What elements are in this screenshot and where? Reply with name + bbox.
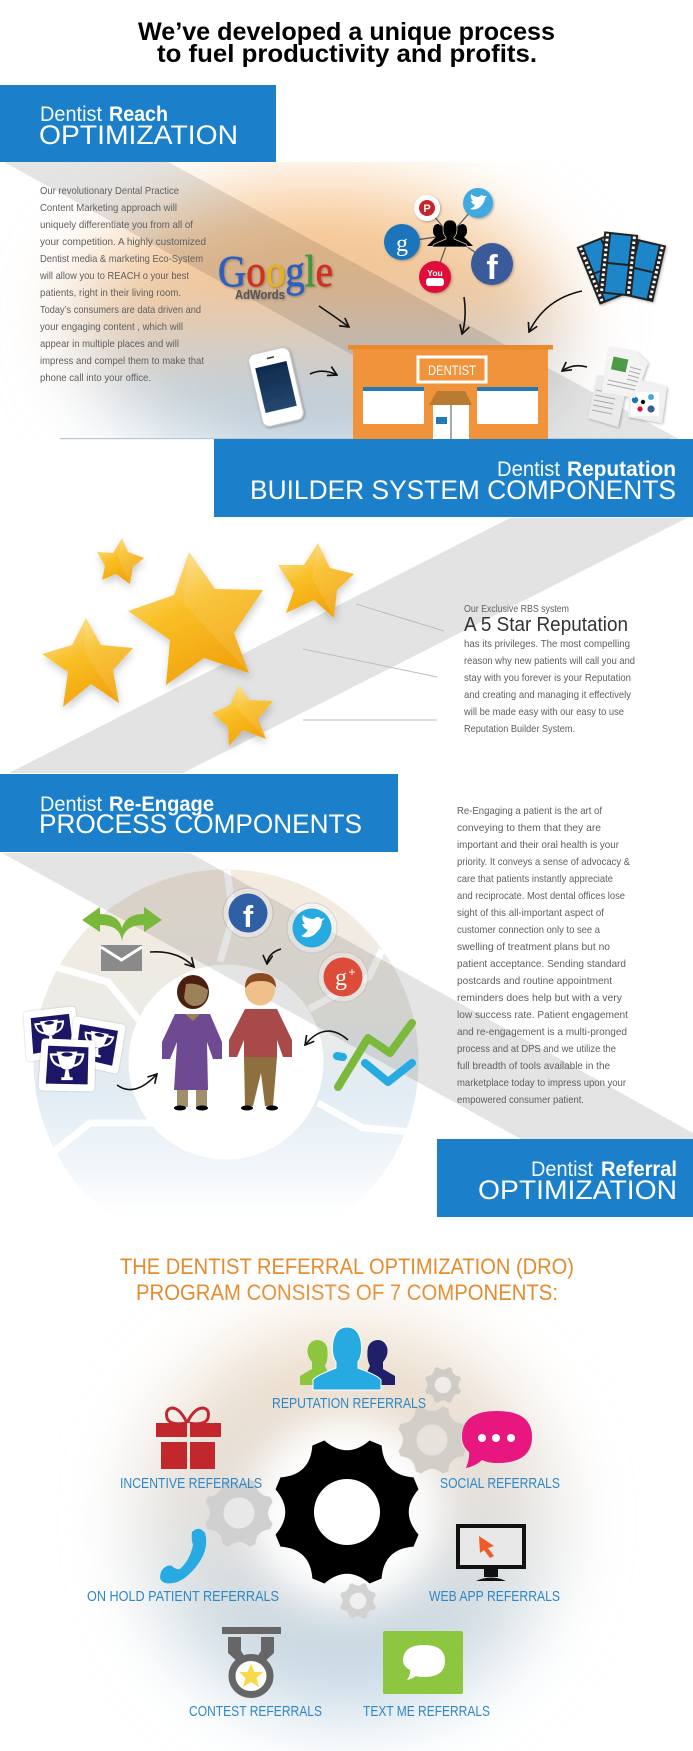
header: dentist re-engage process components: Re-Engage [109,793,214,816]
background glow: referral components [137,1328,557,1712]
component: social referrals: SOCIAL REFERRALS [440,1475,560,1492]
text block: re-engage description: important and their oral health is your [457,840,620,851]
text block: reach description: will allow you to REACH o your best [39,271,189,282]
text block: re-engage description: priority. It conveys a sense of advocacy & [457,857,630,868]
icon: medium gear left [205,1479,273,1547]
heading: dro program: PROGRAM CONSISTS OF 7 COMPONENTS: [136,1280,558,1305]
component: web app referrals: WEB APP REFERRALS [429,1588,560,1605]
icon: social network cluster: g [396,231,408,257]
text block: reach description: impress and compel them to make that [40,356,204,367]
icon: dentist building: DENTIST [428,363,476,378]
text block: 5 star reputation: will be made easy with our easy to use [463,707,624,718]
icon: facebook badge: f [243,899,254,934]
text block: 5 star reputation: A 5 Star Reputation [464,614,628,636]
header: dentist reach optimization [0,85,276,162]
text block: reach description: Our revolutionary Dental Practice [40,186,179,197]
text block: 5 star reputation: Our Exclusive RBS system [464,604,569,615]
component: text me referrals [363,1631,490,1720]
icon: star bottom [212,685,273,746]
text block: re-engage description: and re-engagement is a multi-pronged [457,1027,627,1038]
icon: google plus badge: + [348,965,356,979]
header: dentist referral optimization: Referral [601,1158,677,1181]
icon: documents [588,347,667,427]
header: dentist referral optimization: Dentist [531,1158,593,1181]
icon: green split arrows [82,907,162,941]
arrow: adwords to dentist [319,306,349,327]
figure: man [229,973,292,1110]
header: dentist reputation builder system components: Reputation [567,458,676,481]
text block: reach description: Dentist media & marketing Eco-System [40,254,203,265]
header: dentist reputation builder system components [214,439,693,517]
component: incentive referrals [120,1408,262,1492]
arrow: stamps to patients [117,1074,157,1090]
text block: reach description: your competition. A highly customized [40,237,206,248]
text block: re-engage description: Re-Engaging a patient is the art of [457,806,602,817]
component: text me referrals: TEXT ME REFERRALS [363,1703,490,1720]
text block: 5 star reputation: Reputation Builder System. [464,724,575,735]
component: incentive referrals: INCENTIVE REFERRALS [120,1475,262,1492]
text block: re-engage description: full breadth of tools available in the [457,1061,610,1072]
text block: 5 star reputation: stay with you forever is your Reputation [464,673,631,684]
text block: re-engage description: reminders does help but with a very [457,993,623,1004]
component: on hold patient referrals: ON HOLD PATIENT REFERRALS [87,1588,279,1605]
text block: re-engage description: marketplace today to impress upon your [457,1078,626,1089]
header: dentist reputation builder system components: BUILDER SYSTEM COMPONENTS [250,475,676,505]
title: to fuel productivity and profits. [157,40,537,68]
text block: 5 star reputation: reason why new patients will call you and [464,656,635,667]
text block: re-engage description: swelling of treatment plans but no [457,942,610,953]
text block: re-engage description: sight of this all-important aspect of [457,908,604,919]
icon: google plus badge: g [335,965,347,991]
header: dentist reach optimization: Dentist [40,103,102,126]
arrow: social to dentist [462,297,465,334]
icon: google adwords logo: AdWords [235,288,285,302]
icon: facebook badge [223,888,273,938]
component: web app referrals [429,1526,560,1605]
text block: re-engage description [457,806,630,1106]
text block: re-engage description: low success rate. Patient engagement [457,1010,628,1021]
icon: social network cluster: You [427,268,443,278]
icon: small gear bottom [340,1583,376,1619]
section background: reach glow and diagonal band [4,162,690,460]
text block: reach description: patients, right in their living room. [40,288,181,299]
icon: film strips [577,231,666,305]
icon: line chart [337,1023,412,1087]
icon: smartphone [247,346,305,428]
text block: re-engage description: conveying to them that they are [457,823,601,834]
header: dentist re-engage process components: Dentist [40,793,102,816]
heading: dro program: THE DENTIST REFERRAL OPTIMIZATION (DRO) [120,1254,574,1279]
header: dentist reach optimization: OPTIMIZATION [39,120,238,150]
component: reputation referrals: REPUTATION REFERRALS [272,1395,426,1412]
text block: reach description: Content Marketing approach will [40,203,177,214]
arrow: phone to dentist [310,371,337,375]
header: dentist reach optimization: Reach [109,103,168,126]
header: dentist re-engage process components: PROCESS COMPONENTS [39,809,362,839]
arrow: chart to patients [305,1031,348,1045]
header: dentist re-engage process components [0,774,398,852]
text block: reach description: your engaging content , which will [40,322,183,333]
icon: small star top [97,538,144,584]
text block: re-engage description: postcards and routine appointment [457,976,612,987]
text block: reach description [39,186,206,384]
icon: star right [278,543,354,618]
icon: medium gear upper right [398,1406,466,1474]
icon: envelope [101,945,142,971]
text block: reach description: phone call into your office. [40,373,151,384]
leader lines to stars [303,604,444,720]
text block: reach description: appear in multiple places and will [40,339,179,350]
icon: google adwords logo: Google [218,247,333,296]
icon: social network cluster [384,188,513,293]
icon: star left [42,618,133,707]
header: dentist reputation builder system components: Dentist [497,458,560,481]
text block: 5 star reputation: and creating and managing it effectively [464,690,632,701]
icon: social network cluster: P [423,203,431,215]
text block: re-engage description: empowered consumer patient. [457,1095,584,1106]
heading: dro program [120,1254,574,1305]
text block: re-engage description: care that patients instantly appreciate [457,874,613,885]
process ring [50,870,412,1207]
text block: re-engage description: customer connection only to see a [457,925,600,936]
component: on hold patient referrals [87,1529,279,1605]
header: dentist referral optimization: OPTIMIZATION [478,1175,677,1205]
icon: trophy stamps [27,1010,122,1088]
text block: re-engage description: and reciprocate. Most dental offices lose [457,891,625,902]
component: social referrals [440,1411,560,1492]
title: We’ve developed a unique process [138,18,555,46]
text block: 5 star reputation [463,604,635,735]
arrow: video to dentist [529,291,582,332]
text block: re-engage description: process and at DPS and we utilize the [457,1044,616,1055]
text block: reach description: Today’s consumers are data driven and [40,305,201,316]
icon: social network cluster: f [486,249,498,287]
arrow: documents to dentist [562,366,587,371]
text block: reach description: uniquely differentiate you from all of [40,220,193,231]
icon: small gear top [425,1367,461,1403]
icon: dentist building [348,345,553,439]
icon: google plus badge [318,952,368,1002]
diagonal band: re-engage [2,853,693,1139]
text block: re-engage description: patient acceptance. Sending standard [457,959,626,970]
component: contest referrals [189,1627,322,1720]
title [138,18,555,68]
arrow: social to patients [267,949,281,964]
icon: large black gear [276,1440,418,1584]
diagonal band: reputation [9,518,687,773]
text block: 5 star reputation: has its privileges. The most compelling [464,639,630,650]
arrow: envelope to patients [150,952,194,967]
figure: woman [162,975,222,1110]
component: contest referrals: CONTEST REFERRALS [189,1703,322,1720]
component: reputation referrals [272,1327,426,1412]
header: dentist referral optimization [437,1139,693,1217]
icon: large star [128,552,263,685]
icon: twitter badge [287,903,337,953]
